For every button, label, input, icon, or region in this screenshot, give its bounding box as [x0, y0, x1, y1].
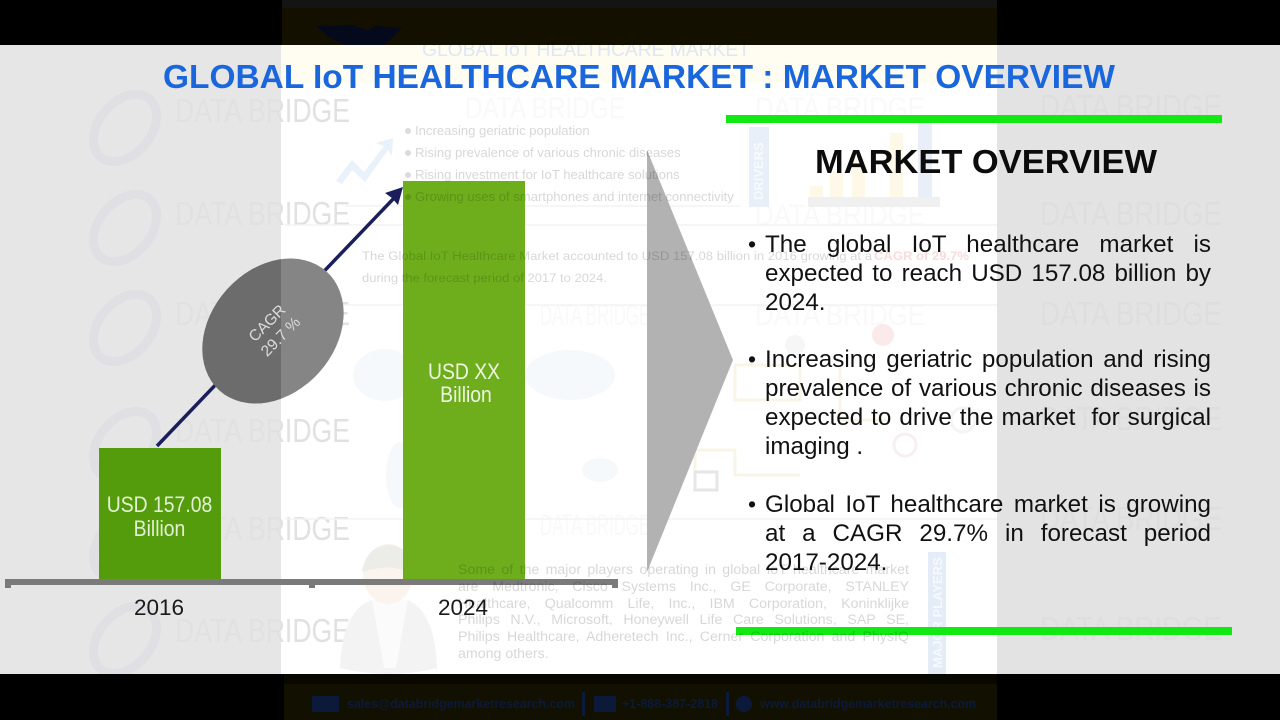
right watermark column: DATA BRIDGE: [1040, 88, 1222, 125]
right watermark column: DATA BRIDGE: [1040, 500, 1222, 537]
faded footer contacts: +1-888-387-2818: [622, 697, 718, 711]
faded major players paragraph: Philips N.V., Microsoft, Honeywell Life Care Solutions, SAP SE,: [458, 612, 909, 628]
bullet: market size: •: [748, 231, 756, 257]
icon: faded growth arrow: [336, 138, 393, 184]
bullet: market size: [748, 231, 1211, 316]
callout: CAGR ellipse: 29.7 %: [258, 314, 304, 360]
right watermark column: DATA BRIDGE: [1040, 195, 1222, 232]
faded major players paragraph: Philips Healthcare, Adheretech Inc., Cerner Corporation and PhysIQ: [458, 629, 909, 645]
bullet: growth rate: [748, 491, 1211, 576]
faded major players tab: MAJOR PLAYERS: [930, 557, 945, 668]
faded drivers list: [405, 123, 734, 204]
centre watermark text: DATA BRIDGE: [755, 92, 925, 125]
faded drivers tab: DRIVERS: [751, 142, 766, 200]
faded dividers: [285, 206, 997, 519]
left watermark column: DATA BRIDGE: [175, 92, 350, 129]
chevron arrow: [647, 150, 733, 572]
bullet: market drivers: imaging .: [765, 433, 863, 460]
title: GLOBAL IoT HEALTHCARE MARKET : MARKET OVERVIEW: [163, 59, 1115, 96]
green rule: bottom: [736, 627, 1232, 635]
bar: 2024: Billion: [440, 383, 492, 407]
centre watermark text: [465, 92, 925, 542]
callout: CAGR ellipse: CAGR: [246, 302, 289, 345]
centre watermark text: DATA BRIDGE: [540, 299, 650, 332]
right watermark column: DATA BRIDGE: [1040, 610, 1222, 647]
left watermark column: [81, 82, 350, 686]
axis label: 2024: 2024: [438, 595, 488, 620]
faded person icon: [340, 544, 437, 674]
arrow: growth from 2016 to 2024: [157, 187, 403, 446]
bar: 2024: USD XX: [428, 360, 500, 384]
bullet: market size: 2024.: [765, 289, 826, 316]
centre watermark text: DATA BRIDGE: [465, 92, 625, 125]
left watermark column: DATA BRIDGE: [175, 295, 350, 332]
bullet: market drivers: prevalence of various chronic diseases is: [765, 375, 1211, 402]
faded major players paragraph: Healthcare, Qualcomm Life, Inc., IBM Corporation, Koninklijke: [458, 596, 909, 612]
faded paragraph: CAGR of 29.7%: [874, 249, 969, 263]
faded paragraph: during the forecast period of 2017 to 2024.: [362, 271, 607, 285]
faded major players paragraph: are Medtronic, Cisco Systems Inc., GE Corporate, STANLEY: [458, 579, 909, 595]
faded paragraph: The Global IoT Healthcare Market accounted to USD 157.08 billion in 2016 growing at a: [362, 249, 872, 263]
x axis: [5, 579, 618, 588]
faded drivers list: Growing uses of smartphones and internet connectivity: [415, 189, 734, 204]
bullet: market drivers: Increasing geriatric population and rising: [765, 346, 1211, 373]
left watermark column: DATA BRIDGE: [175, 612, 350, 649]
bar: 2016: Billion: [134, 517, 185, 541]
faded footer contacts: www.databridgemarketresearch.com: [759, 697, 976, 711]
green rule: top: [726, 115, 1222, 123]
faded footer contacts: sales@databridgemarketresearch.com: [347, 697, 575, 711]
right watermark column: DATA BRIDGE: [1040, 295, 1222, 332]
faded drivers tab: [749, 127, 769, 207]
faded major players paragraph: among others.: [458, 646, 549, 662]
callout: CAGR ellipse: [202, 258, 344, 404]
bullet: market drivers: •: [748, 346, 756, 372]
bar: 2016: [99, 448, 221, 580]
faded paragraph: [362, 249, 969, 285]
centre watermark text: DATA BRIDGE: [755, 199, 925, 232]
centre watermark text: DATA BRIDGE: [755, 299, 925, 332]
right watermark column: DATA BRIDGE: [1040, 400, 1222, 437]
bullet: market size: expected to reach USD 157.08 billion by: [765, 260, 1211, 287]
bullet: market drivers: [748, 346, 1211, 460]
faded network icon: [674, 324, 975, 490]
faded major players paragraph: Some of the major players operating in global IoT healthcare market: [458, 562, 909, 578]
faded footer contacts: [312, 692, 976, 716]
bar: 2016: USD 157.08: [107, 493, 212, 517]
axis label: 2016: 2016: [134, 595, 184, 620]
right watermark column: [1040, 88, 1222, 647]
bullet: market drivers: expected to drive the market for surgical: [765, 404, 1211, 431]
faded drivers list: Rising prevalence of various chronic diseases: [415, 145, 681, 160]
faded bar chart icon: [808, 122, 940, 207]
bullet: market size: The global IoT healthcare market is: [765, 231, 1211, 258]
faded drivers list: Increasing geriatric population: [415, 123, 590, 138]
bullet: growth rate: at a CAGR 29.7% in forecast period: [765, 520, 1211, 547]
faded slide heading: GLOBAL IoT HEALTHCARE MARKET: [422, 40, 750, 61]
side edge mask: [0, 674, 1280, 720]
centre watermark text: DATA BRIDGE: [540, 509, 650, 542]
left watermark column: DATA BRIDGE: [175, 510, 350, 547]
faded major players paragraph: [458, 562, 909, 662]
bullet: growth rate: •: [748, 491, 756, 517]
faded world map: [353, 349, 618, 508]
bullet: growth rate: Global IoT healthcare market is growing: [765, 491, 1211, 518]
heading: market overview: MARKET OVERVIEW: [815, 144, 1157, 181]
icon: faded map in header band: [316, 25, 402, 45]
left watermark column: DATA BRIDGE: [175, 195, 350, 232]
bar: 2024: [403, 181, 525, 580]
left watermark column: DATA BRIDGE: [175, 412, 350, 449]
faded drivers list: Rising investment for IoT healthcare solutions: [415, 167, 680, 182]
bullet: growth rate: 2017-2024.: [765, 549, 887, 576]
